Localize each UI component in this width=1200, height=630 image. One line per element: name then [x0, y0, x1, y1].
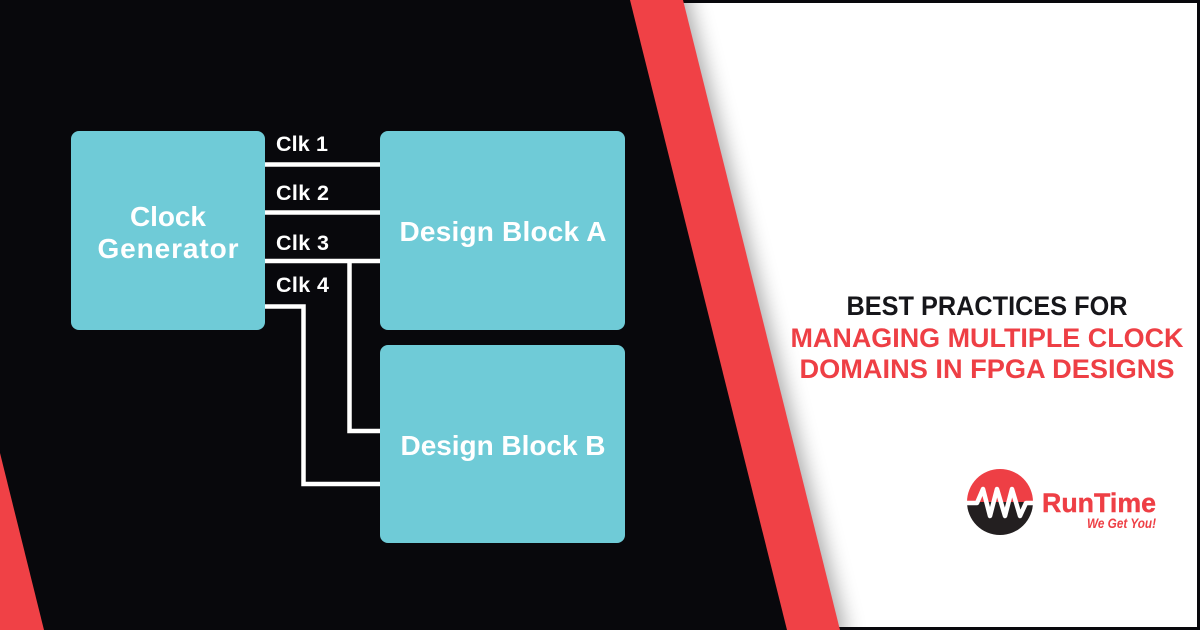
label: Clk 2: Clk 2 [276, 181, 329, 205]
box: design block B: Design Block B [400, 430, 606, 461]
frame border [600, 0, 1200, 630]
wordmark: RunTime [1042, 488, 1156, 518]
box: clock generator: Generator [98, 233, 239, 264]
icon: pulse circle [966, 469, 1034, 535]
box: design block B [380, 345, 625, 543]
box: design block A: Design Block A [400, 216, 606, 247]
label: Clk 1: Clk 1 [276, 132, 328, 156]
red diagonal band [630, 0, 840, 630]
title [790, 291, 1184, 384]
panel shadow [684, 3, 856, 627]
title: MANAGING MULTIPLE CLOCK [790, 323, 1184, 353]
red corner triangle [0, 453, 44, 630]
tagline: We Get You! [1087, 516, 1156, 531]
box: clock generator: Clock [130, 201, 206, 232]
label: Clk 3: Clk 3 [276, 231, 329, 255]
label: Clk 4: Clk 4 [276, 273, 329, 297]
logo: RunTime [966, 469, 1156, 535]
box: design block A [380, 131, 625, 330]
title: BEST PRACTICES FOR [846, 291, 1128, 321]
title: DOMAINS IN FPGA DESIGNS [800, 354, 1174, 384]
panel: dark background [0, 0, 788, 630]
box: clock generator [71, 131, 265, 330]
connector lines [262, 164, 382, 484]
